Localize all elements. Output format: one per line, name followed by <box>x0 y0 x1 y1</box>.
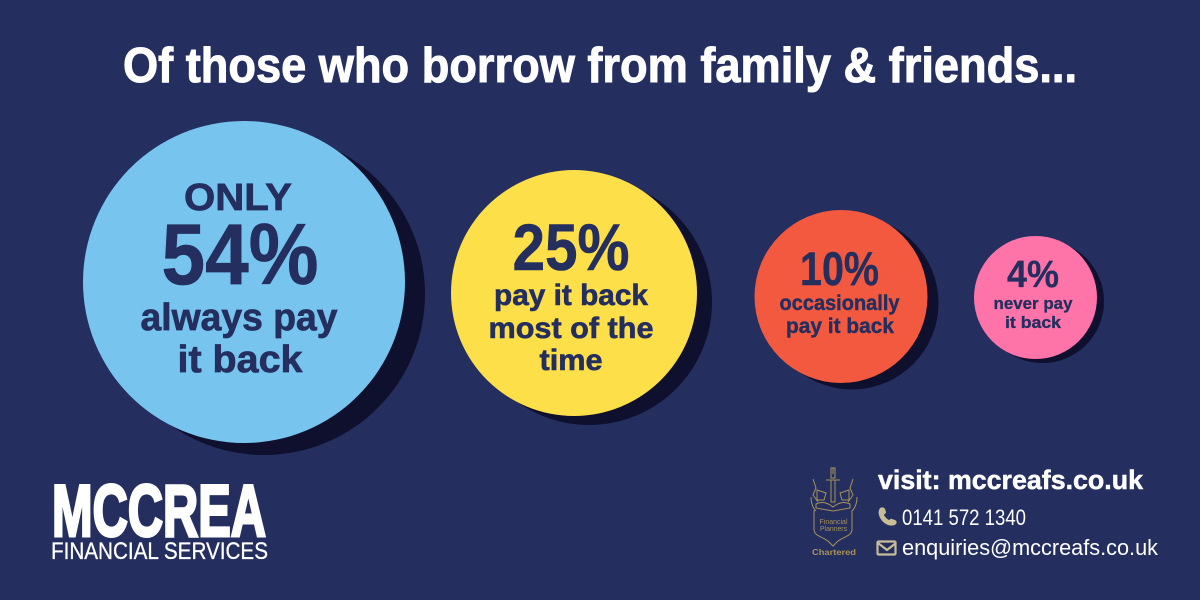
panel: 54% always pay it back: it back <box>178 339 303 381</box>
icon: Chartered Financial Planners crest: Financial <box>820 517 848 526</box>
logo: McCrea Financial Services: MCCREA <box>52 471 266 552</box>
panel: 10% occasionally pay it back: pay it back <box>786 315 894 338</box>
panel: 54% always pay it back: always pay <box>140 297 338 339</box>
panel: 4% never pay it back: it back <box>1005 313 1062 332</box>
panel: 25% pay it back most of the time: most of the <box>488 312 654 345</box>
email address: enquiries@mccreafs.co.uk <box>902 535 1159 560</box>
icon: Chartered Financial Planners crest: Planners <box>820 524 847 533</box>
panel: 25% pay it back most of the time: pay it back <box>494 279 648 312</box>
icon: envelope <box>878 542 896 554</box>
icon: Chartered Financial Planners crest: Chartered <box>812 547 856 557</box>
panel: 10% occasionally pay it back: occasionally <box>780 292 900 315</box>
panel: 54% always pay it back: ONLY <box>184 177 292 219</box>
phone number: 0141 572 1340 <box>902 505 1026 530</box>
panel: 10% occasionally pay it back: 10% <box>800 242 879 295</box>
title: Of those who borrow from family & friends... <box>123 39 1077 93</box>
panel: 25% pay it back most of the time <box>451 170 712 425</box>
logo: McCrea Financial Services <box>51 471 268 565</box>
panel: 25% pay it back most of the time: 25% <box>512 210 630 284</box>
logo: McCrea Financial Services: FINANCIAL SERVICES <box>51 538 268 565</box>
panel: 4% never pay it back: 4% <box>1007 254 1059 296</box>
panel: 4% never pay it back: never pay <box>994 294 1073 313</box>
icon: Chartered Financial Planners crest <box>811 468 857 557</box>
panel: 54% always pay it back: 54% <box>162 207 318 303</box>
panel: 54% always pay it back <box>83 121 425 455</box>
panel: 25% pay it back most of the time: time <box>540 344 602 377</box>
panel: 10% occasionally pay it back <box>754 210 938 390</box>
icon: phone <box>879 507 897 526</box>
website heading: visit: mccreafs.co.uk <box>878 465 1144 495</box>
panel: 4% never pay it back <box>974 236 1104 363</box>
